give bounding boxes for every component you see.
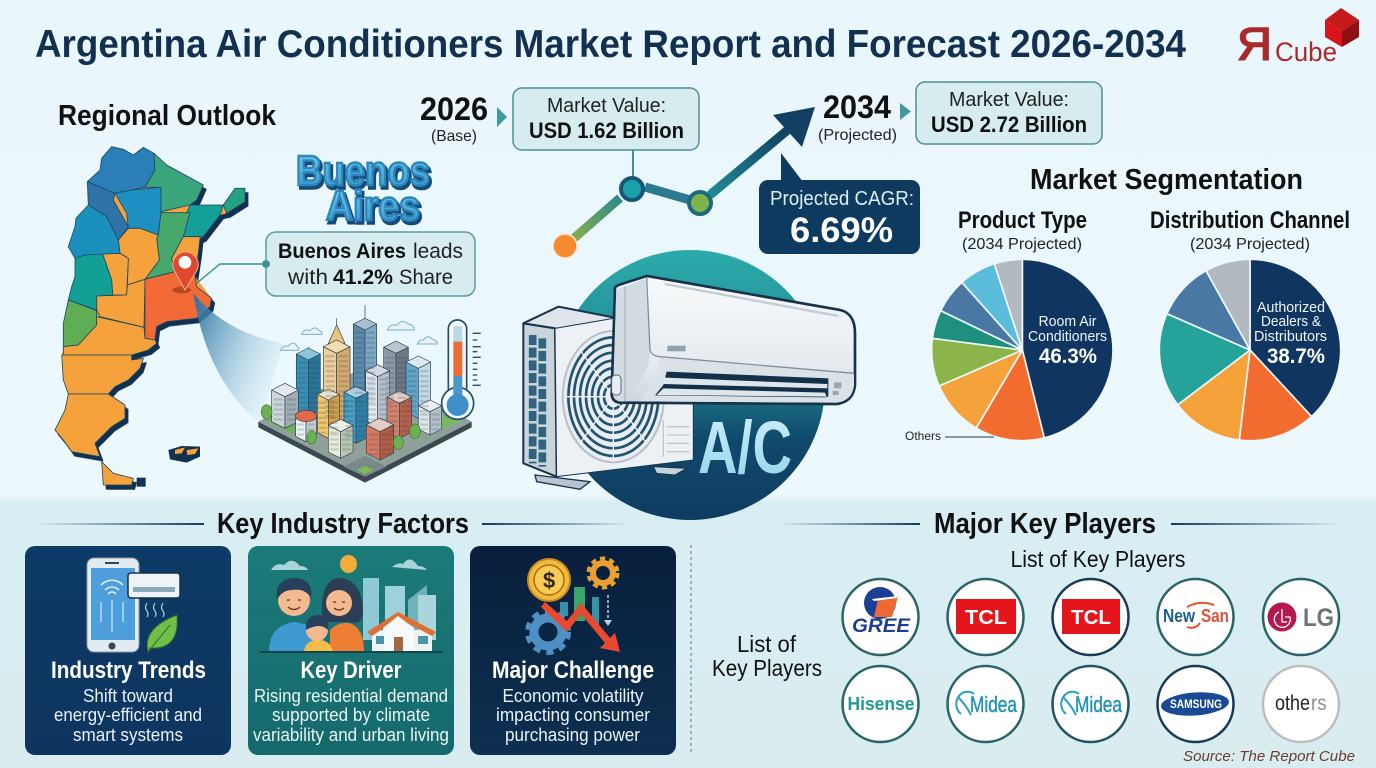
beam to city: [193, 293, 283, 423]
logo: Hisense: Hisense: [848, 694, 914, 714]
card: Industry Trends: Industry Trends: [51, 657, 206, 684]
icon: coin, gears and falling arrow: $: [543, 568, 555, 593]
logo: Report Cube: Я: [1237, 18, 1272, 70]
box: 2026 market value: USD 1.62 Billion: [529, 118, 684, 143]
year label: 2034: [818, 89, 897, 144]
text: Buenos Aires 3D label: Buenos: [296, 147, 430, 194]
year label: 2026: [420, 91, 488, 145]
icon: family and home: [260, 555, 443, 652]
callout: Buenos Aires share: leads: [413, 240, 463, 263]
side label: List of Key Players: Key Players: [712, 655, 822, 681]
icon: coin, gears and falling arrow: [528, 559, 620, 652]
logo: Report Cube: [1237, 8, 1359, 70]
logo: Midea second: [1052, 666, 1128, 742]
callout: Buenos Aires share: Share: [399, 266, 453, 289]
heading: Product Type: [958, 207, 1087, 253]
callout: projected CAGR: Projected CAGR:: [770, 188, 914, 210]
indoor unit: [612, 276, 855, 404]
building windows: [278, 332, 436, 455]
card: Key Driver: Rising residential demand: [254, 685, 448, 706]
logo: NewSan: New: [1163, 606, 1196, 626]
year label: 2034: (Projected): [818, 127, 897, 144]
arrow: 2026 to value: [497, 107, 507, 127]
trees: [261, 405, 420, 450]
card: Key Driver: [248, 546, 454, 755]
box: 2026 market value: [513, 88, 699, 150]
logo: Samsung: [1158, 666, 1234, 742]
box: 2034 market value: Market Value:: [949, 89, 1069, 111]
logo: TCL second: [1052, 579, 1128, 655]
backdrop circle: [555, 250, 825, 520]
chart: growth line: [553, 107, 815, 258]
logo: NewSan: [1158, 579, 1234, 655]
icon: Falkland islands: [137, 446, 200, 487]
year label: 2026: 2026: [420, 91, 488, 127]
card: Major Challenge: Economic volatility: [502, 685, 644, 706]
panel: regional outlook illustration: [55, 147, 481, 487]
illustration: city: [258, 305, 472, 483]
chart: distribution channel pie: [1159, 259, 1341, 441]
card: Key Driver: variability and urban living: [253, 724, 449, 745]
logo: TCL: TCL: [965, 607, 1007, 629]
label: authorized dealers: [1254, 299, 1327, 368]
heading: Regional Outlook: Regional Outlook: [58, 100, 277, 132]
label: authorized dealers: Dealers &: [1261, 313, 1321, 330]
text: Buenos Aires 3D label: [296, 147, 432, 232]
logo: LG: LG: [1303, 604, 1334, 632]
logo: Gree: [842, 579, 918, 655]
callout: Buenos Aires share: [266, 232, 475, 296]
icon: thermometer: [442, 320, 481, 419]
logo: others: othe: [1275, 692, 1310, 715]
logo: NewSan: San: [1201, 606, 1229, 626]
logo: Samsung: SAMSUNG: [1170, 697, 1222, 711]
heading: Product Type: Product Type: [958, 207, 1087, 234]
title: Argentina Air Conditioners Market Report and Forecast 2026-2034: [35, 23, 1186, 66]
box: 2026 market value: Market Value:: [547, 95, 666, 117]
label: room air conditioners: 46.3%: [1039, 345, 1097, 368]
card: Industry Trends: energy-efficient and: [54, 704, 202, 725]
heading: Distribution Channel: [1150, 207, 1350, 253]
source note: Source: The Report Cube: [1183, 749, 1355, 765]
text: Buenos Aires 3D label: Buenos: [298, 150, 432, 197]
connector: pin to callout: [197, 261, 269, 283]
card: Industry Trends: Shift toward: [83, 685, 173, 706]
heading: Major Key Players: Major Key Players: [934, 508, 1156, 540]
side label: List of Key Players: [712, 631, 822, 681]
card: Industry Trends: smart systems: [73, 724, 183, 745]
label: authorized dealers: Distributors: [1254, 328, 1327, 345]
logo: Midea second: Midea: [1075, 692, 1123, 717]
heading: Key Industry Factors: Key Industry Factors: [217, 508, 469, 540]
callout: Buenos Aires share: 41.2%: [333, 266, 393, 289]
text: Buenos Aires 3D label: Aires: [328, 185, 422, 232]
arrow: 2034 to value: [900, 103, 911, 120]
logo: TCL second: TCL: [1071, 607, 1111, 629]
illustration: air conditioner: [523, 250, 855, 520]
label: room air conditioners: Room Air: [1038, 313, 1097, 330]
callout: projected CAGR: 6.69%: [790, 211, 893, 250]
card: Key Driver: Key Driver: [300, 657, 402, 684]
heading: Distribution Channel: (2034 Projected): [1190, 236, 1310, 253]
heading: Market Segmentation: Market Segmentation: [1030, 164, 1303, 196]
logo: others: rs: [1311, 692, 1326, 715]
logo: Report Cube: Cube: [1275, 37, 1337, 67]
card: Industry Trends: [25, 546, 231, 755]
text: Buenos Aires 3D label: Aires: [326, 182, 420, 229]
card: Major Challenge: purchasing power: [505, 724, 640, 745]
logo: LG: [1263, 579, 1339, 655]
chart: product type pie: [932, 259, 1113, 441]
logo: others: [1263, 666, 1339, 742]
label: room air conditioners: Conditioners: [1028, 328, 1107, 345]
box: 2034 market value: USD 2.72 Billion: [931, 112, 1087, 137]
label: others: Others: [905, 429, 941, 443]
card: Major Challenge: impacting consumer: [496, 704, 650, 725]
callout: projected CAGR: [759, 153, 920, 254]
box: 2034 market value: [916, 82, 1102, 144]
heading: Product Type: (2034 Projected): [962, 236, 1082, 253]
clouds: [281, 321, 437, 350]
icon: phone and AC: [87, 558, 180, 652]
card: Key Driver: supported by climate: [272, 704, 430, 725]
logo: TCL: [948, 579, 1024, 655]
outdoor unit: [523, 307, 693, 489]
side label: List of Key Players: List of: [737, 631, 797, 657]
callout: Buenos Aires share: Buenos Aires: [278, 240, 406, 263]
label: others: [905, 429, 994, 443]
year label: 2034: 2034: [823, 89, 891, 125]
callout: Buenos Aires share: with: [287, 266, 328, 289]
subheading: List of Key Players: List of Key Players: [1010, 546, 1186, 572]
card: Major Challenge: Major Challenge: [492, 657, 654, 684]
logo: Gree: GREE: [852, 616, 911, 637]
map: Argentina provinces: [55, 147, 245, 485]
text: A/C: A/C: [698, 406, 792, 489]
label: authorized dealers: 38.7%: [1267, 345, 1325, 368]
year label: 2026: (Base): [431, 128, 477, 145]
label: room air conditioners: [1028, 313, 1107, 368]
logo: Midea: Midea: [970, 692, 1018, 717]
icon: location pin: [172, 252, 198, 293]
logo: Midea: [948, 666, 1024, 742]
card: Major Challenge: [470, 546, 676, 755]
logo: Hisense: [842, 666, 918, 742]
label: authorized dealers: Authorized: [1257, 299, 1325, 316]
